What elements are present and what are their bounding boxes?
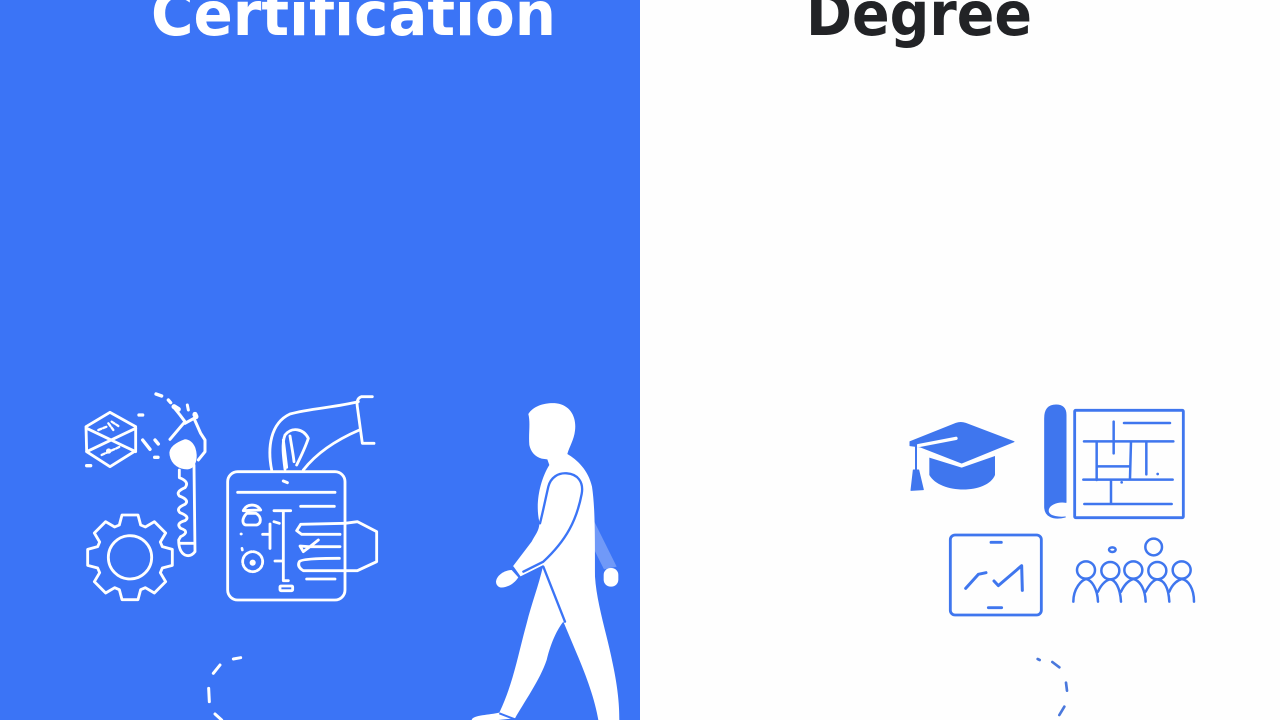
icon: graduation cap [910, 422, 1014, 490]
icon: key [170, 405, 205, 556]
front hand [496, 570, 518, 588]
dashed arc right [1038, 659, 1067, 715]
back arm shadow [594, 522, 617, 569]
icon: cube [86, 394, 171, 467]
icon: hand holding tablet [297, 522, 377, 571]
icon: tablet [228, 472, 345, 600]
icon: group of people [1073, 539, 1194, 602]
figure: walking person [472, 403, 619, 720]
icon: hand tapping [270, 397, 374, 470]
dashed arc left [209, 658, 241, 720]
icon group: academic [910, 405, 1194, 615]
back hand [604, 568, 618, 587]
icon: blueprint [1045, 405, 1183, 518]
body silhouette [472, 403, 619, 720]
icon group: skills and tools [86, 394, 377, 600]
icon: chart board [950, 535, 1041, 615]
shoe line [499, 713, 515, 719]
panel: degree [640, 0, 1280, 720]
arm and leg contour [513, 473, 582, 622]
icon: gear [88, 515, 172, 600]
panel: certification [0, 0, 640, 720]
